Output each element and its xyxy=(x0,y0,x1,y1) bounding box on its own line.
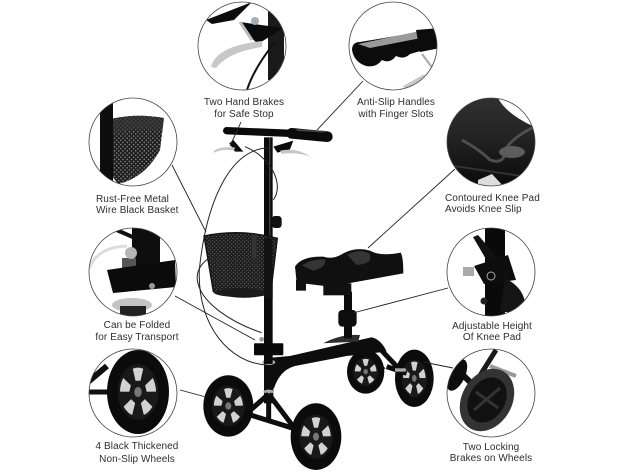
label: two hand brakes: for Safe Stop xyxy=(214,109,274,120)
label: can be folded: Can be Folded xyxy=(104,320,170,331)
label: can be folded: for Easy Transport xyxy=(95,332,179,343)
knee pad and post xyxy=(295,249,403,338)
label: thickened wheels: Non-Slip Wheels xyxy=(99,454,175,465)
front wheels xyxy=(203,375,341,470)
inset: folding mechanism xyxy=(89,227,177,318)
label: adjustable height: Adjustable Height xyxy=(452,321,532,332)
knee scooter product image xyxy=(197,130,434,470)
label: adjustable height: Of Knee Pad xyxy=(463,332,521,343)
stem and folding clamp xyxy=(254,137,283,364)
wire basket xyxy=(204,233,277,298)
rear wheels xyxy=(347,350,434,407)
label: contoured knee pad: Avoids Knee Slip xyxy=(445,204,522,215)
handlebar with grips xyxy=(213,130,327,157)
inset: locking brakes xyxy=(443,349,535,441)
inset: thickened wheel xyxy=(88,349,177,437)
inset: hand brake xyxy=(198,2,286,90)
label: two hand brakes: Two Hand Brakes xyxy=(204,97,284,108)
label: contoured knee pad: Contoured Knee Pad xyxy=(445,193,540,204)
inset: anti-slip handle xyxy=(349,2,440,90)
callout leader lines xyxy=(172,81,455,397)
inset: contoured knee pad xyxy=(447,95,540,188)
label: thickened wheels: 4 Black Thickened xyxy=(96,441,178,452)
label: anti-slip handles: with Finger Slots xyxy=(357,109,434,120)
scooter frame xyxy=(245,335,407,428)
label: basket: Wire Black Basket xyxy=(96,205,179,216)
label: anti-slip handles: Anti-Slip Handles xyxy=(357,97,435,108)
inset: wire basket xyxy=(89,96,177,191)
infographic scene xyxy=(88,2,540,470)
label: basket: Rust-Free Metal xyxy=(96,194,169,205)
label: locking brakes: Two Locking xyxy=(463,442,519,453)
label: locking brakes: Brakes on Wheels xyxy=(450,453,532,464)
inset: adjustable height xyxy=(447,228,535,318)
brake cables xyxy=(197,147,277,365)
